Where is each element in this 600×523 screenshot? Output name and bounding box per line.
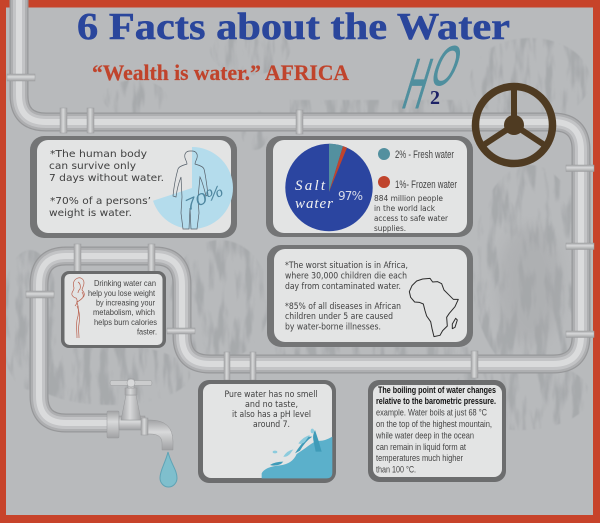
text: boiling point body: while water deep in the ocean: [375, 430, 474, 440]
grunge texture: [0, 25, 590, 430]
icon: faucet: [107, 379, 177, 487]
97 percent label: 97%: [338, 189, 363, 203]
icon: valve wheel: [476, 86, 552, 164]
icon: Africa map: [409, 278, 458, 337]
text: pure water fact: Pure water has no smell: [224, 390, 318, 400]
panel: weight loss: [61, 271, 166, 348]
title: 6 Facts about the Water: [77, 6, 510, 48]
text: metabolism fact: metabolism, which: [93, 307, 155, 317]
text: boiling point body: [375, 408, 492, 474]
subtitle quote: “Wealth is water.” AFRICA: [92, 60, 349, 85]
grunge dark patch: [498, 225, 562, 345]
human figure: [173, 151, 208, 229]
percent label: 70%: [183, 183, 226, 215]
legend: fresh water: [378, 148, 454, 161]
text: survival facts: [49, 149, 164, 219]
text: metabolism fact: help you lose weight: [88, 288, 156, 298]
text: safe water access: access to safe water: [374, 214, 449, 223]
text: pure water fact: it also has a pH level: [232, 410, 311, 420]
text: Africa facts: day from contaminated water.: [285, 282, 401, 292]
text: boiling point bold heading: The boiling point of water changes: [378, 385, 496, 395]
text: survival facts: 7 days without water.: [49, 173, 164, 184]
text: safe water access: 884 million people: [374, 194, 443, 203]
text: metabolism fact: by increasing your: [96, 298, 155, 308]
text: boiling point bold heading: [376, 385, 496, 406]
text: pure water fact: around 7.: [253, 420, 290, 430]
text: metabolism fact: [88, 278, 157, 336]
text: boiling point body: than 100 °C.: [376, 464, 416, 474]
text: survival facts: can survive only: [49, 161, 136, 172]
text: survival facts: *70% of a persons’: [50, 196, 151, 207]
text: Africa facts: children under 5 are caused: [285, 312, 393, 322]
salt water label: [295, 178, 333, 212]
text: metabolism fact: helps burn calories: [94, 317, 157, 327]
icon: water splash: [262, 429, 332, 478]
text: boiling point body: on the top of the highest mountain,: [376, 419, 492, 429]
salt water label: Salt: [295, 178, 326, 194]
panel: water types pie: [266, 136, 473, 237]
icon: water drop: [160, 452, 177, 487]
pie chart: [285, 144, 373, 231]
text: pure water fact: [224, 390, 318, 430]
pipe collars: [7, 74, 594, 380]
H2O formula: [395, 34, 470, 123]
panel: human body: [30, 136, 237, 238]
legend: frozen water: 1%- Frozen water: [395, 179, 457, 191]
text: metabolism fact: Drinking water can: [94, 278, 156, 288]
text: Africa facts: *The worst situation is in Africa,: [285, 261, 408, 271]
panel: pure water: [198, 380, 336, 483]
text: survival facts: *The human body: [50, 149, 147, 160]
panel: Africa: [267, 245, 473, 347]
H2O formula: H: [395, 44, 440, 123]
text: survival facts: weight is water.: [49, 208, 132, 219]
pipe: main run: [19, 0, 581, 423]
H2O formula: 2: [430, 87, 440, 109]
text: Africa facts: [285, 261, 408, 332]
text: boiling point bold heading: relative to the barometric pressure.: [376, 396, 496, 406]
panel: boiling point: [368, 380, 506, 482]
text: boiling point body: temperatures much higher: [376, 453, 463, 463]
legend: frozen water: [378, 176, 457, 191]
text: safe water access: supplies.: [374, 224, 406, 233]
icon: woman outline: [72, 278, 84, 338]
text: safe water access: in the world lack: [374, 204, 435, 213]
salt water label: water: [295, 196, 333, 212]
text: Africa facts: by water-borne illnesses.: [285, 322, 381, 332]
70 percent pie: [153, 147, 233, 229]
text: Africa facts: *85% of all diseases in African: [285, 302, 401, 312]
text: metabolism fact: faster.: [137, 326, 157, 336]
text: boiling point body: can remain in liquid form at: [376, 442, 466, 452]
text: pure water fact: and no taste,: [245, 400, 298, 410]
text: boiling point body: example. Water boils at just 68 °C: [376, 408, 487, 418]
text: Africa facts: where 30,000 children die each: [285, 272, 407, 282]
legend: fresh water: 2% - Fresh water: [395, 149, 454, 161]
text: safe water access: [374, 194, 449, 233]
H2O formula: O: [423, 34, 470, 97]
